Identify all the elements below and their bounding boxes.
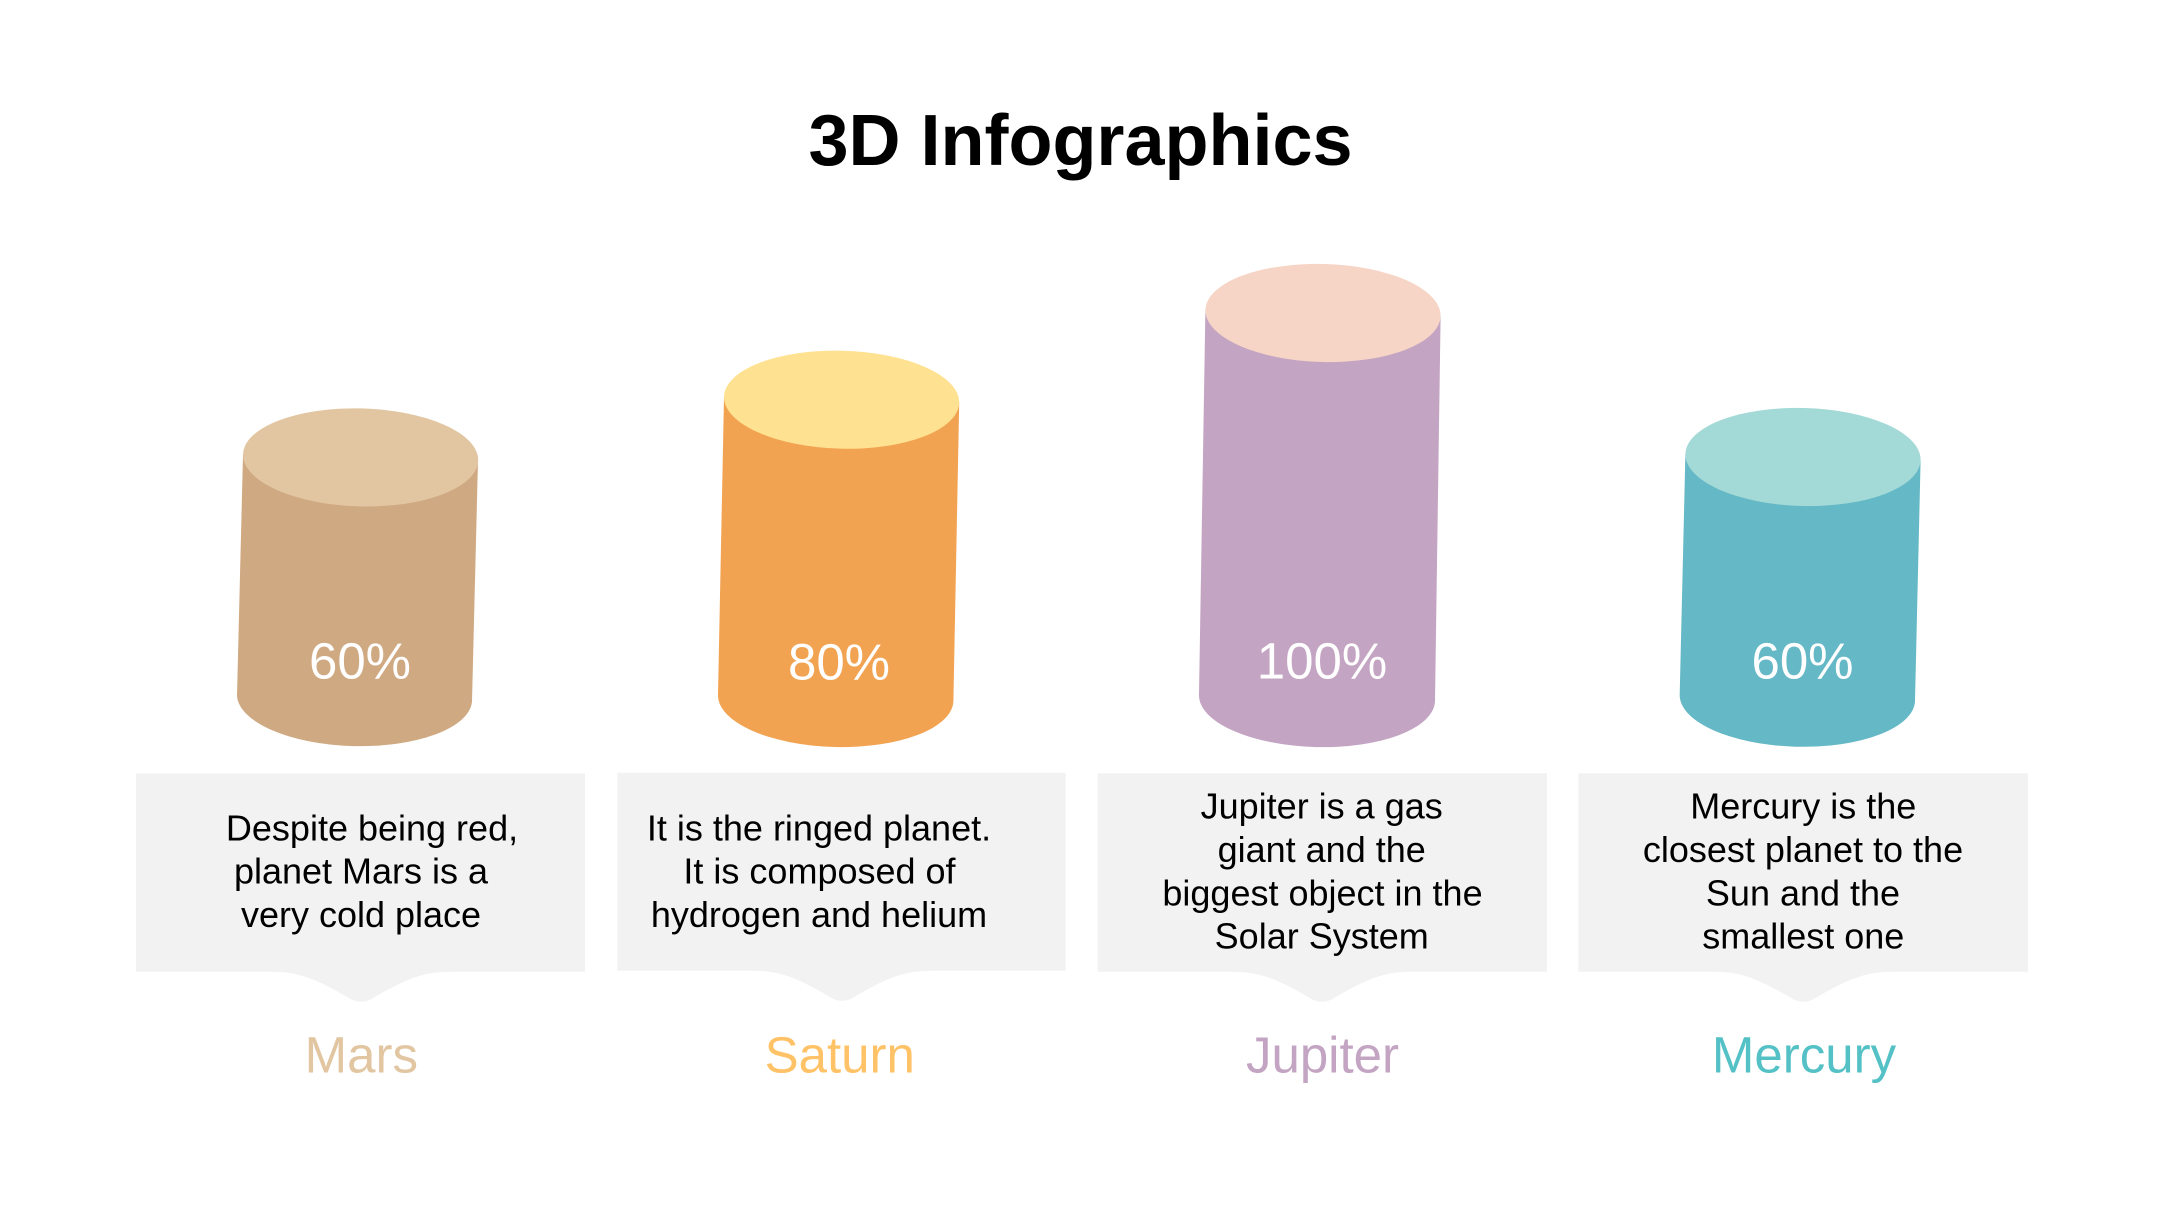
cylinder: Mars 60% (237, 405, 479, 746)
cylinder: Saturn 80% (718, 348, 960, 747)
callout: Saturn description: It is composed of (683, 851, 957, 892)
panel: Saturn (617, 348, 1066, 1084)
callout: Saturn description: hydrogen and helium (651, 894, 987, 935)
label: Mars: Mars (305, 1027, 418, 1084)
cylinder: Jupiter 100%: 100% (1257, 632, 1387, 690)
callout: Mars description: planet Mars is a (234, 851, 489, 892)
callout: Jupiter description: biggest object in the (1162, 872, 1483, 913)
callout: Mercury description: smallest one (1702, 916, 1904, 957)
cylinder: Jupiter 100% (1199, 261, 1442, 747)
callout: Mars description: Despite being red, (226, 807, 518, 848)
cylinder: Mars 60%: 60% (309, 632, 411, 690)
panel: Jupiter (1098, 261, 1547, 1084)
label: Jupiter: Jupiter (1246, 1027, 1399, 1084)
title: 3D Infographics (808, 101, 1353, 181)
callout: Jupiter description (1098, 773, 1547, 1002)
callout: Mercury description: Mercury is the (1690, 786, 1916, 827)
label: Mercury: Mercury (1712, 1027, 1897, 1084)
cylinder: Mercury 60% (1680, 405, 1922, 747)
panel: Mercury (1578, 405, 2028, 1084)
callout: Mercury description (1578, 773, 2028, 1002)
callout: Saturn description: It is the ringed planet. (647, 807, 991, 848)
callout: Mars description: very cold place (241, 894, 481, 935)
callout: Mars description (136, 774, 585, 1002)
cylinder: Mercury 60%: 60% (1751, 632, 1854, 690)
callout: Mercury description: closest planet to the (1643, 829, 1963, 870)
callout: Saturn description (617, 773, 1066, 1001)
callout: Jupiter description: Jupiter is a gas (1201, 786, 1443, 827)
cylinder: Saturn 80%: 80% (788, 634, 890, 690)
callout: Mercury description: Sun and the (1706, 872, 1900, 913)
callout: Jupiter description: giant and the (1218, 829, 1426, 870)
label: Saturn: Saturn (765, 1027, 915, 1084)
callout: Jupiter description: Solar System (1215, 916, 1429, 957)
panel: Mars (136, 405, 585, 1084)
